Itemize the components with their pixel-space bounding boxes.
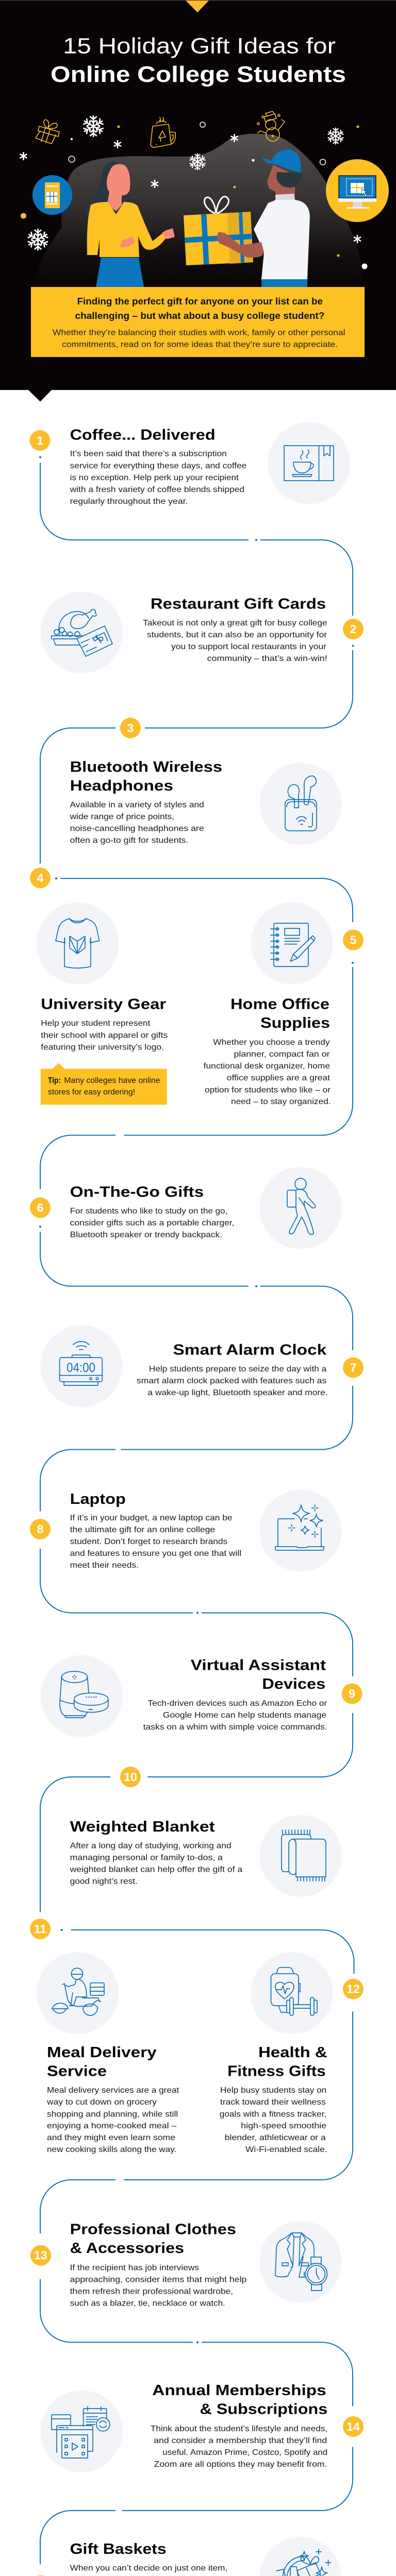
icon: blazer and watch [260, 2221, 341, 2303]
heading: Fitness Gifts [227, 2063, 326, 2079]
icon: streaming windows and calendar [40, 2391, 123, 2472]
badge 7: 7 [350, 1361, 356, 1375]
badge 4: 4 [37, 871, 44, 885]
heading: & Subscriptions [200, 2401, 327, 2417]
badge 15 [30, 2575, 51, 2576]
icon: phone bubble [32, 175, 72, 215]
heading: Service [47, 2063, 107, 2079]
icon: snowman [257, 111, 285, 141]
body text: new cooking skills along the way. [47, 2145, 176, 2154]
badge 7 [343, 1357, 364, 1378]
body text: After a long day of studying, working and [70, 1841, 232, 1851]
body text: It’s been said that there’s a subscription [70, 450, 227, 459]
body text: them refresh their professional wardrobe, [70, 2287, 233, 2296]
intro box: commitments, read on for some ideas that they’re sure to appreciate. [62, 341, 338, 349]
decorative: snowflakes [20, 115, 367, 269]
badge 10 [120, 1767, 141, 1787]
icon: smart speakers [40, 1655, 123, 1737]
body text: and features to ensure you get one that will [70, 1549, 241, 1558]
body text: managing personal or family to-dos, a [70, 1854, 223, 1862]
badge 1: 1 [37, 434, 43, 447]
heading: Smart Alarm Clock [173, 1342, 327, 1358]
tip callout: Tip: [48, 1076, 61, 1085]
body text: need – to stay organized. [231, 1097, 331, 1106]
body text: Takeout is not only a great gift for busy college [143, 619, 327, 628]
body text: Tech-driven devices such as Amazon Echo or [147, 1699, 327, 1708]
body text [143, 1699, 327, 1732]
body text: way to cut down on grocery [46, 2098, 157, 2107]
badge 6 [30, 1197, 51, 1218]
badge 11 [30, 1919, 51, 1939]
icon: mug [151, 117, 175, 147]
badge 14: 14 [346, 2420, 360, 2433]
heading: Restaurant Gift Cards [151, 596, 326, 613]
heading: Weighted Blanket [70, 1819, 215, 1835]
badge 5 [343, 929, 364, 950]
body text: Bluetooth speaker or trendy backpack. [70, 1230, 222, 1240]
body text: Help busy students stay on [220, 2086, 326, 2095]
icon: delivery scooter [37, 1952, 119, 2034]
body text [137, 1365, 328, 1397]
badge 4 [30, 868, 51, 888]
panel: 11 meal delivery service [30, 1919, 179, 2154]
body text: smart alarm clock packed with features such as [137, 1377, 326, 1385]
heading: Laptop [70, 1491, 126, 1507]
body text: students, but it can also be an opportunity for [147, 631, 327, 639]
body text: service for everything these days, and coffee [70, 462, 247, 470]
body text: goals with a fitness tracker, [220, 2110, 326, 2119]
panel: 2 restaurant gift cards [40, 591, 364, 673]
body text [220, 2086, 327, 2154]
tip callout [41, 1063, 167, 1105]
illustration: gift exchange [20, 111, 389, 287]
tip callout: Many colleges have online [64, 1076, 160, 1085]
body text: If the recipient has job interviews [70, 2264, 199, 2273]
badge 9: 9 [349, 1687, 355, 1700]
top pointer [186, 1, 209, 12]
background blob [35, 134, 364, 287]
tip callout: stores for easy ordering! [48, 1088, 135, 1096]
body text [204, 1038, 331, 1106]
panel: 3 bluetooth headphones [70, 718, 342, 845]
body text: high-speed smoothie [241, 2122, 326, 2130]
panel: 10 weighted blanket [70, 1767, 341, 1897]
body text: planner, compact fan or [234, 1050, 330, 1059]
badge 5: 5 [350, 934, 357, 947]
body text: with a fresh variety of coffee blends shipped [70, 485, 244, 494]
body text: meet their needs. [70, 1561, 139, 1570]
body text: their school with apparel or gifts [41, 1031, 168, 1040]
badge 14 [343, 2416, 364, 2437]
body text: If it’s in your budget, a new laptop can be [70, 1514, 233, 1522]
body text: functional desk organizer, home [204, 1062, 330, 1071]
badge 2 [343, 619, 364, 639]
intro box: Finding the perfect gift for anyone on your list can be [77, 296, 323, 307]
body text: good night’s rest. [70, 1877, 138, 1886]
body text: office supplies are a great [227, 1074, 331, 1082]
body text [143, 619, 327, 663]
icon: notebook and pen [251, 903, 333, 984]
heading [227, 2044, 327, 2079]
panel: 14 annual memberships [40, 2382, 364, 2472]
body text: shopping and planning, while still [47, 2110, 178, 2119]
intro box: Whether they’re balancing their studies with work, family or other personal [53, 328, 345, 337]
badge 6: 6 [37, 1201, 43, 1214]
icon: alarm clock: 04:00 [67, 1361, 95, 1375]
gift box [184, 197, 264, 265]
icon: folded blanket [260, 1815, 341, 1897]
body text: Think about the student’s lifestyle and needs, [151, 2425, 327, 2433]
heading: University Gear [41, 996, 166, 1013]
body text [70, 1514, 241, 1570]
icon: takeout and gift card [40, 591, 123, 673]
heading: Headphones [70, 777, 173, 794]
body text [70, 1207, 234, 1240]
badge 8: 8 [37, 1522, 44, 1536]
body text: enjoying a home-cooked meal – [47, 2122, 176, 2130]
panel: 1 coffee delivered [30, 422, 350, 506]
panel: header [0, 0, 396, 402]
body text: community – that’s a win-win! [207, 654, 327, 663]
bottom pointer [28, 390, 52, 402]
title [51, 34, 346, 87]
panel: 6 on-the-go gifts [30, 1167, 341, 1249]
badge 10: 10 [124, 1770, 137, 1784]
badge 3 [120, 718, 141, 738]
badge 2: 2 [350, 622, 356, 636]
body text: noise-cancelling headphones are [70, 824, 204, 833]
icon: walker with backpack [260, 1167, 341, 1249]
icon: monitor bubble [326, 159, 389, 222]
body text: featuring their university’s logo. [41, 1043, 164, 1052]
body text: wide range of price points, [70, 812, 174, 821]
body text: often a go-to gift for students. [70, 836, 188, 845]
body text: Meal delivery services are a great [47, 2086, 179, 2095]
heading: Annual Memberships [152, 2382, 326, 2399]
body text: track toward their wellness [220, 2098, 326, 2107]
badge 8 [30, 1519, 51, 1539]
badge 3: 3 [127, 721, 134, 735]
title: Online College Students [51, 62, 346, 87]
intro box [31, 287, 365, 357]
panel: 8 laptop [30, 1490, 341, 1571]
badge 12: 12 [346, 1982, 360, 1996]
heading [70, 2222, 236, 2257]
heading: Professional Clothes [70, 2222, 236, 2238]
title: 15 Holiday Gift Ideas for [63, 34, 336, 59]
body text: Wi-Fi-enabled scale. [245, 2145, 327, 2154]
heading: On-The-Go Gifts [70, 1184, 204, 1200]
badge 9 [342, 1684, 362, 1704]
body text: Help your student represent [41, 1019, 151, 1028]
body text [70, 801, 204, 845]
body text: is no exception. Help perk up your recipient [70, 473, 239, 482]
heading: Virtual Assistant [191, 1657, 326, 1673]
badge 13 [30, 2245, 51, 2266]
body text: a wake-up light, Bluetooth speaker and more. [147, 1388, 328, 1397]
body text: the ultimate gift for an online college [70, 1526, 215, 1534]
heading [191, 1657, 326, 1692]
heading: Gift Baskets [70, 2541, 167, 2557]
panel: 12 health and fitness gifts [220, 1952, 364, 2154]
heading: Meal Delivery [47, 2044, 157, 2061]
panel: 7 smart alarm clock [40, 1325, 364, 1407]
badge 13: 13 [34, 2249, 47, 2262]
body text [70, 1841, 242, 1886]
body text: For students who like to study on the go, [70, 1207, 227, 1215]
connector path [39, 456, 354, 2565]
icon: alarm clock [40, 1325, 123, 1407]
panel: 13 professional clothes [30, 2221, 341, 2308]
body text: consider gifts such as a portable charger, [70, 1219, 234, 1227]
heading: Bluetooth Wireless [70, 759, 222, 775]
icon: t-shirt [37, 903, 119, 984]
panel: 5 home office supplies [204, 903, 364, 1106]
heading: Supplies [260, 1015, 330, 1031]
body text: and consider a membership that they’ll find [154, 2436, 327, 2445]
icon: gift basket [260, 2537, 341, 2576]
body text [70, 450, 247, 506]
body text: tasks on a whim with simple voice commands. [143, 1723, 327, 1732]
badge 11: 11 [34, 1922, 46, 1936]
body text: approaching, consider items that might help [70, 2276, 247, 2284]
body text: and they might even learn some [47, 2133, 175, 2142]
body text: blender, athleticwear or a [225, 2133, 326, 2142]
heading [152, 2382, 327, 2417]
body text: Zoom are all options they may benefit from. [154, 2460, 327, 2469]
body text: When you can’t decide on just one item, [70, 2564, 227, 2573]
heading [70, 759, 222, 794]
body text [151, 2425, 327, 2469]
badge 12 [343, 1979, 364, 1999]
panel: 15 gift baskets [30, 2537, 341, 2576]
body text: you to support local restaurants in your [171, 642, 327, 651]
heading: Health & [258, 2044, 327, 2061]
body text: Help students prepare to seize the day with a [149, 1365, 326, 1374]
heading [47, 2044, 157, 2079]
body text: weighted blanket can help offer the gift of a [70, 1866, 242, 1874]
icon: wireless earbuds [260, 762, 341, 845]
icon: fitness watch and dumbbell [251, 1952, 333, 2034]
body text: Whether you choose a trendy [213, 1038, 330, 1047]
heading: Home Office [230, 996, 329, 1013]
heading [230, 996, 330, 1031]
heading: Coffee... Delivered [70, 427, 216, 444]
figure: man [254, 149, 310, 287]
body text [70, 2264, 247, 2308]
icon: sparkling laptop [260, 1490, 341, 1571]
body text: regularly throughout the year. [70, 497, 188, 506]
icon: coffee box [268, 422, 350, 504]
badge 1 [30, 430, 51, 451]
body text: useful. Amazon Prime, Costco, Spotify and [162, 2448, 327, 2457]
heading: & Accessories [70, 2240, 184, 2257]
body text: Google Home can help students manage [163, 1711, 326, 1720]
body text [41, 1019, 168, 1052]
panel: 4 university gear [30, 868, 168, 1105]
body text: Available in a variety of styles and [70, 801, 204, 809]
panel: 9 virtual assistant devices [40, 1655, 362, 1737]
figure: woman [86, 161, 175, 287]
body text: such as a blazer, tie, necklace or watch. [70, 2299, 225, 2308]
heading: Devices [262, 1676, 325, 1692]
icon: small gift [36, 120, 59, 144]
body text: student. Don’t forget to research brands [70, 1537, 227, 1546]
body text: option for students who like – or [205, 1086, 331, 1094]
body text [46, 2086, 179, 2154]
intro box: challenging – but what about a busy college student? [75, 311, 325, 321]
